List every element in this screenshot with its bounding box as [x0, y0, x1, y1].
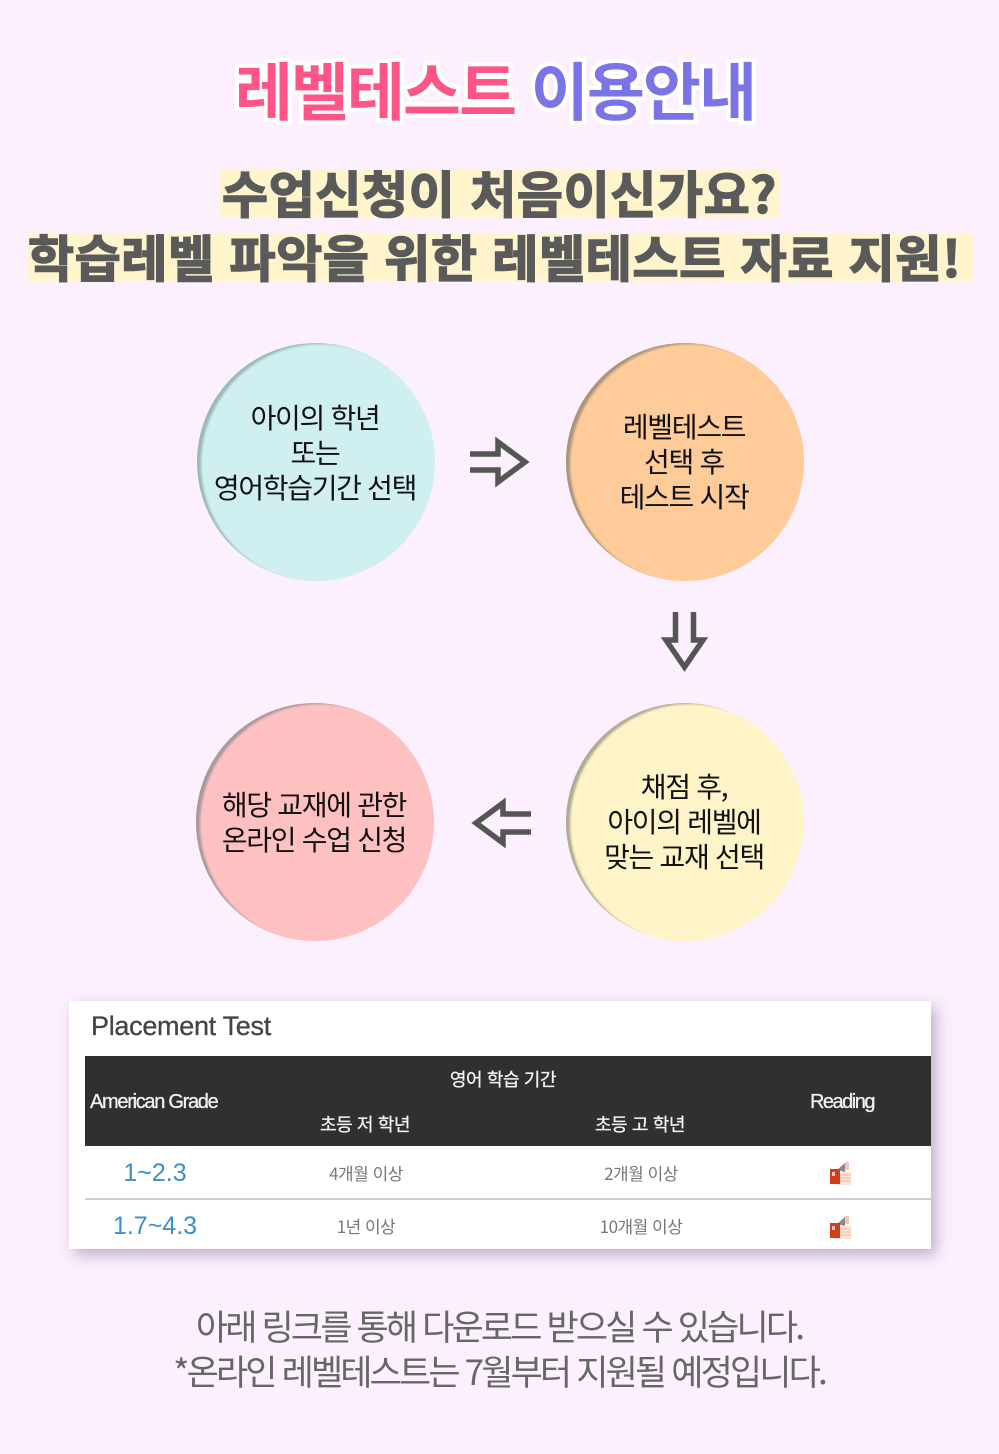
icon: ppt file row 2 — [830, 1216, 851, 1239]
step 1 text: 아이의 학년 — [251, 397, 379, 437]
header: American Grade: American Grade — [90, 1091, 217, 1113]
subtitle line 1 — [220, 169, 779, 217]
step 4 text: 해당 교재에 관한 — [222, 784, 406, 824]
step 1 text — [214, 397, 416, 507]
table header band — [85, 1056, 931, 1146]
step 2 text — [620, 406, 749, 516]
header: upper grades: 초등 고 학년 — [595, 1111, 685, 1137]
header: lower grades: 초등 저 학년 — [320, 1111, 410, 1137]
step 2 text: 레벨테스트 — [623, 406, 745, 446]
step 2 text: 테스트 시작 — [620, 476, 748, 516]
arrow down — [660, 612, 708, 672]
step 2 circle — [566, 343, 804, 581]
header: Reading: Reading — [810, 1091, 874, 1113]
subtitle line 2: 학습레벨 파악을 위한 레벨테스트 자료 지원! — [28, 220, 961, 292]
step 1 text: 영어학습기간 선택 — [214, 467, 416, 507]
subtitle line 2 — [27, 234, 973, 281]
row divider — [85, 1198, 931, 1200]
step 3 text — [604, 766, 764, 876]
step 2 text: 선택 후 — [644, 441, 724, 481]
step 3 text: 아이의 레벨에 — [607, 801, 761, 841]
row 2 lower: 1년 이상 — [337, 1213, 395, 1238]
row 1 lower: 4개월 이상 — [329, 1160, 403, 1185]
footer note — [173, 1300, 826, 1396]
arrow right — [470, 436, 530, 488]
row 1 grade: 1~2.3 — [123, 1159, 187, 1187]
icon: ppt file row 1 — [830, 1162, 851, 1185]
footer note: *온라인 레벨테스트는 7월부터 지원될 예정입니다. — [173, 1345, 825, 1396]
step 1 circle — [197, 343, 435, 581]
placement test table panel — [69, 1001, 931, 1249]
step 4 circle — [196, 703, 434, 941]
header: study period: 영어 학습 기간 — [450, 1066, 556, 1092]
step 3 circle — [566, 703, 804, 941]
row 1 upper: 2개월 이상 — [604, 1160, 678, 1185]
arrow left — [472, 798, 531, 848]
subtitle line 1: 수업신청이 처음이신가요? — [222, 156, 777, 228]
step 1 text: 또는 — [291, 432, 339, 472]
table heading: Placement Test — [91, 1011, 271, 1041]
footer note: 아래 링크를 통해 다운로드 받으실 수 있습니다. — [196, 1300, 802, 1351]
step 3 text: 채점 후, — [641, 766, 727, 806]
row 2 upper: 10개월 이상 — [600, 1213, 682, 1238]
step 4 text — [222, 784, 406, 859]
row 2 grade: 1.7~4.3 — [113, 1212, 197, 1240]
title: 레벨테스트 이용안내 — [235, 43, 755, 134]
step 4 text: 온라인 수업 신청 — [222, 819, 406, 859]
step 3 text: 맞는 교재 선택 — [604, 836, 764, 876]
